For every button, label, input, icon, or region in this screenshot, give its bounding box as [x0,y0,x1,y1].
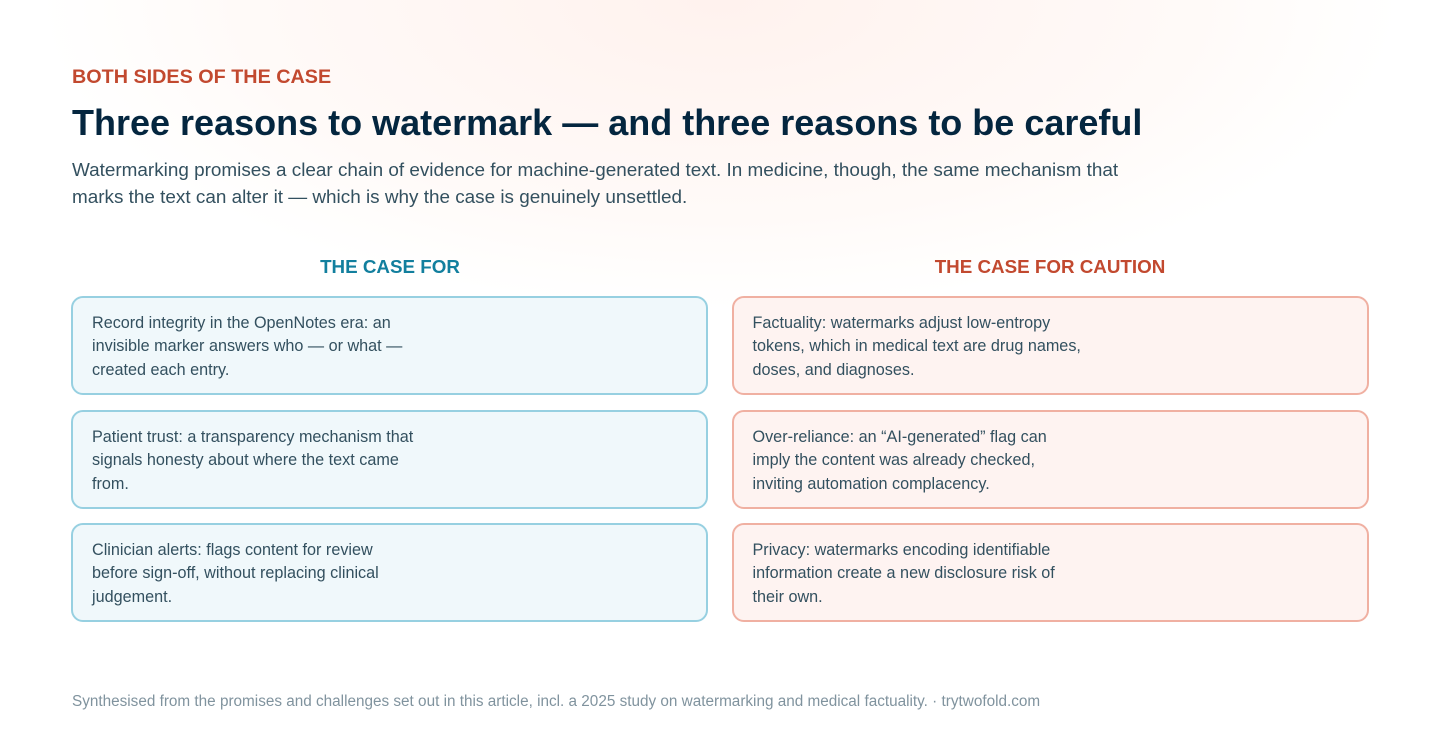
card: clinician alerts: judgement. [92,588,172,606]
card: factuality [732,296,1368,395]
card: factuality: doses, and diagnoses. [752,360,914,378]
column heading: the case for: THE CASE FOR [320,256,460,277]
card: record integrity: invisible marker answers who — or what — [92,337,402,355]
card: record integrity [71,296,708,395]
footer source note: Synthesised from the promises and challenges set out in this article, incl. a 2025 study on watermarking and medical factuality. · trytwofold.com [72,692,1040,710]
card: privacy: information create a new disclosure risk of [752,564,1055,582]
card: over-reliance: imply the content was already checked, [752,451,1035,469]
title: Three reasons to watermark — and three reasons to be careful [72,102,1142,143]
column heading: the case for caution: THE CASE FOR CAUTION [935,256,1165,277]
card: patient trust [71,410,708,509]
card: over-reliance [732,410,1368,509]
card: over-reliance: Over-reliance: an “AI-generated” flag can [752,428,1047,446]
card: privacy [732,523,1368,622]
card: over-reliance: inviting automation complacency. [752,474,990,492]
card: record integrity: created each entry. [92,360,229,378]
intro text [72,160,1118,208]
card: factuality: tokens, which in medical text are drug names, [752,337,1081,355]
card: factuality: Factuality: watermarks adjust low-entropy [752,314,1050,332]
eyebrow label: BOTH SIDES OF THE CASE [72,66,331,88]
intro text: Watermarking promises a clear chain of evidence for machine-generated text. In medicine, though, the same mechanism that [72,160,1118,181]
card: clinician alerts: Clinician alerts: flags content for review [92,540,373,558]
card: patient trust: signals honesty about where the text came [92,451,399,469]
card: privacy: their own. [752,588,823,606]
card: privacy: Privacy: watermarks encoding identifiable [752,540,1050,558]
card: clinician alerts [71,523,708,622]
card: record integrity: Record integrity in the OpenNotes era: an [92,314,391,332]
card: patient trust: Patient trust: a transparency mechanism that [92,428,413,446]
card: clinician alerts: before sign-off, without replacing clinical [92,564,379,582]
card: patient trust: from. [92,474,129,492]
intro text: marks the text can alter it — which is why the case is genuinely unsettled. [72,187,687,208]
